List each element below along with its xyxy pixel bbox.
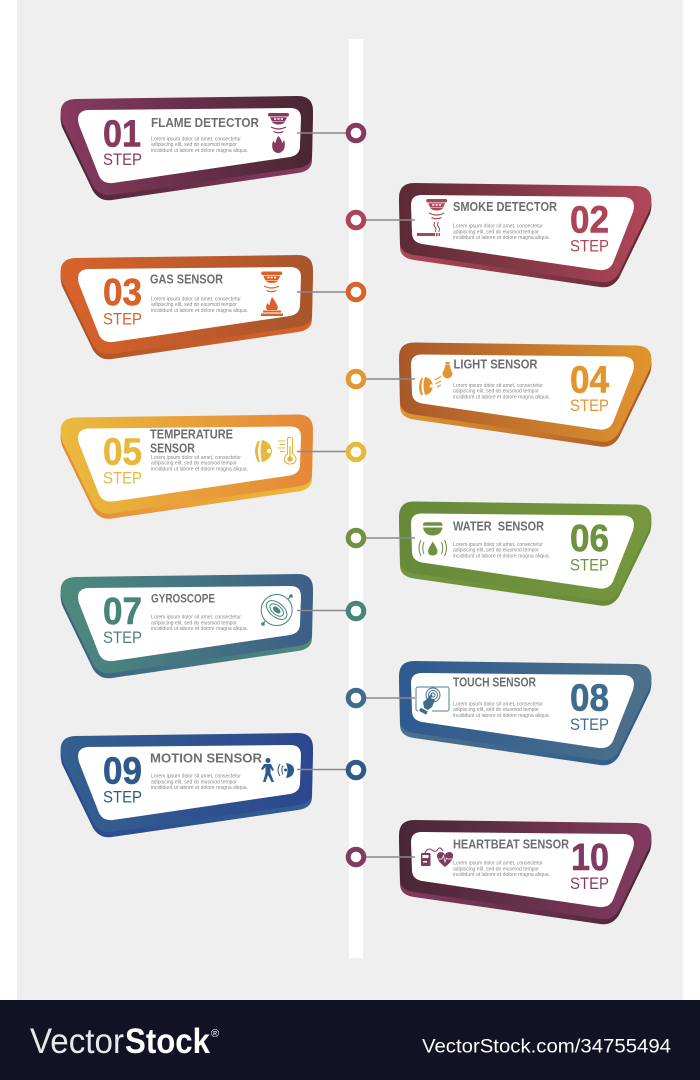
panel: step 03 gas sensor xyxy=(61,255,364,359)
connector and node xyxy=(348,212,415,228)
footer image id: VectorStock.com/34755494 xyxy=(422,1037,671,1058)
step number: 06 xyxy=(570,518,609,560)
heading: MOTION SENSOR xyxy=(150,751,263,766)
card shape xyxy=(399,183,651,287)
step label: STEP xyxy=(570,874,609,893)
heading: HEARTBEAT SENSOR xyxy=(453,836,570,851)
step number: 07 xyxy=(103,591,142,633)
panel: step 04 light sensor xyxy=(348,342,651,447)
card shape xyxy=(61,255,313,359)
footer logo: Vector xyxy=(30,1022,124,1061)
footer logo xyxy=(30,1022,219,1061)
panel: step 01 flame detector xyxy=(61,96,364,200)
heading: WATER SENSOR xyxy=(453,518,545,533)
body text xyxy=(453,224,550,241)
body text: adipiscing elit, sed do eiusmod tempor xyxy=(151,779,237,785)
body text xyxy=(151,296,248,314)
step label: STEP xyxy=(103,309,142,328)
body text: adipiscing elit, sed do eiusmod tempor xyxy=(151,461,237,467)
panel: step 08 touch sensor xyxy=(348,661,651,765)
step label: STEP xyxy=(570,715,609,734)
body text: Lorem ipsum dolor sit amet, consectetur xyxy=(453,542,543,548)
body text xyxy=(151,774,248,791)
step label: STEP xyxy=(570,555,609,574)
footer logo: ® xyxy=(211,1028,219,1040)
body text: Lorem ipsum dolor sit amet, consectetur xyxy=(453,383,543,389)
icon: heartbeat sensor xyxy=(421,848,453,867)
body text: adipiscing elit, sed do eiusmod tempor xyxy=(453,548,539,554)
panel: step 06 water sensor xyxy=(348,502,651,606)
heading xyxy=(150,426,233,456)
step number: 02 xyxy=(570,200,609,242)
icon: gas sensor xyxy=(261,272,283,316)
body text: Lorem ipsum dolor sit amet, consectetur xyxy=(151,296,241,302)
card shape xyxy=(61,574,313,678)
icon: motion sensor xyxy=(261,758,294,782)
body text: incididunt ut labore et dolore magna aliqua. xyxy=(151,785,248,791)
connector and node xyxy=(297,125,364,141)
body text: incididunt ut labore et dolore magna aliqua. xyxy=(453,872,550,878)
body text: incididunt ut labore et dolore magna aliqua. xyxy=(453,235,550,241)
body text: adipiscing elit, sed do eiusmod tempor xyxy=(453,707,539,713)
body text: Lorem ipsum dolor sit amet, consectetur xyxy=(151,774,241,780)
icon: water sensor xyxy=(419,522,446,556)
step label: STEP xyxy=(570,237,609,256)
body text xyxy=(453,542,550,560)
icon: gyroscope xyxy=(261,594,293,626)
body text: Lorem ipsum dolor sit amet, consectetur xyxy=(453,861,543,867)
connector and node xyxy=(348,690,415,706)
body text: incididunt ut labore et dolore magna aliqua. xyxy=(151,466,248,472)
panel: step 02 smoke detector xyxy=(348,183,651,287)
connector and node xyxy=(297,284,364,300)
step label: STEP xyxy=(103,468,142,487)
body text xyxy=(453,861,550,878)
body text: adipiscing elit, sed do eiusmod tempor xyxy=(453,389,539,395)
body text: Lorem ipsum dolor sit amet, consectetur xyxy=(453,701,543,707)
body text xyxy=(453,383,550,400)
card shape xyxy=(399,342,651,447)
icon: flame detector xyxy=(268,113,289,153)
step label: STEP xyxy=(103,150,142,169)
body text: adipiscing elit, sed do eiusmod tempor xyxy=(151,142,237,148)
footer bar xyxy=(0,1000,700,1080)
heading: SMOKE DETECTOR xyxy=(453,199,558,214)
connector and node xyxy=(297,444,364,460)
step number: 03 xyxy=(103,272,142,314)
heading: GYROSCOPE xyxy=(151,594,215,606)
step label: STEP xyxy=(103,787,142,806)
body text xyxy=(453,701,550,719)
connector and node xyxy=(348,530,415,546)
footer logo: Stock xyxy=(125,1022,210,1061)
connector and node xyxy=(348,849,415,865)
body text: Lorem ipsum dolor sit amet, consectetur xyxy=(151,455,241,461)
connector and node xyxy=(348,371,415,387)
step label: STEP xyxy=(570,396,609,415)
body text xyxy=(151,615,248,632)
card shape xyxy=(61,733,313,837)
body text: incididunt ut labore et dolore magna aliqua. xyxy=(151,308,248,314)
heading: GAS SENSOR xyxy=(150,272,224,287)
body text: incididunt ut labore et dolore magna aliqua. xyxy=(453,713,550,719)
card shape xyxy=(399,661,651,765)
connector and node xyxy=(297,762,364,778)
icon: light sensor xyxy=(419,362,452,395)
body text: adipiscing elit, sed do eiusmod tempor xyxy=(453,229,539,235)
step number: 08 xyxy=(570,678,609,720)
body text: Lorem ipsum dolor sit amet, consectetur xyxy=(151,136,241,142)
body text: Lorem ipsum dolor sit amet, consectetur xyxy=(453,224,543,230)
heading: LIGHT SENSOR xyxy=(454,356,538,371)
heading: TOUCH SENSOR xyxy=(453,675,536,690)
step number: 04 xyxy=(570,359,609,401)
step number: 09 xyxy=(103,750,142,792)
timeline bar xyxy=(349,39,363,958)
heading: FLAME DETECTOR xyxy=(151,115,260,130)
panel: step 09 motion sensor xyxy=(61,733,364,837)
connector and node xyxy=(297,603,364,619)
body text: incididunt ut labore et dolore magna aliqua. xyxy=(151,148,248,154)
step label: STEP xyxy=(103,628,142,647)
body text xyxy=(151,455,248,472)
card shape xyxy=(61,414,313,519)
icon: smoke detector xyxy=(417,199,447,236)
body text: incididunt ut labore et dolore magna aliqua. xyxy=(151,626,248,632)
card shape xyxy=(61,96,313,200)
panel: step 07 gyroscope xyxy=(61,574,364,678)
body text: adipiscing elit, sed do eiusmod tempor xyxy=(151,302,237,308)
body text: incididunt ut labore et dolore magna aliqua. xyxy=(453,554,550,560)
step number: 01 xyxy=(103,114,141,156)
body text: incididunt ut labore et dolore magna aliqua. xyxy=(453,394,550,400)
body text: adipiscing elit, sed do eiusmod tempor xyxy=(151,620,237,626)
heading: TEMPERATURE xyxy=(150,426,233,441)
panel: step 05 temperature sensor xyxy=(61,414,364,519)
icon: touch sensor xyxy=(416,687,449,715)
body text xyxy=(151,136,248,154)
heading: SENSOR xyxy=(150,441,195,456)
step number: 10 xyxy=(571,837,609,879)
body text: Lorem ipsum dolor sit amet, consectetur xyxy=(151,615,241,621)
step number: 05 xyxy=(103,431,142,473)
panel: step 10 heartbeat sensor xyxy=(348,820,651,924)
card shape xyxy=(399,820,651,924)
body text: adipiscing elit, sed do eiusmod tempor xyxy=(453,866,539,872)
icon: temperature sensor xyxy=(255,438,296,464)
card shape xyxy=(399,502,651,606)
